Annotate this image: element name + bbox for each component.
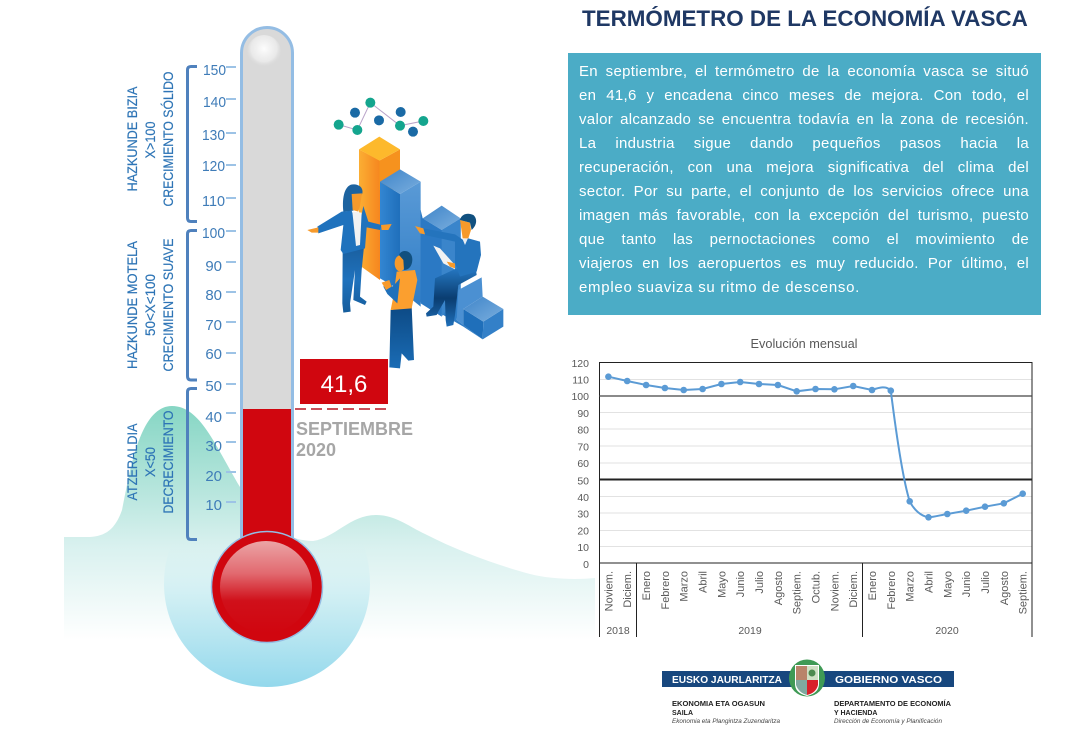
line chart: evolución mensual — [571, 336, 1032, 637]
network nodes — [334, 98, 428, 137]
thermometer scale: 130 — [202, 127, 225, 144]
department text, Basque: EKONOMIA ETA OGASUN — [672, 701, 765, 708]
logo: Gobierno Vasco: GOBIERNO VASCO — [835, 674, 942, 686]
thermometer scale: 60 — [205, 346, 222, 363]
sitting man figure — [415, 214, 481, 327]
thermometer scale: 30 — [205, 438, 222, 455]
month labels — [603, 571, 1030, 614]
blue bars — [380, 169, 503, 339]
date label: SEPTIEMBRE — [296, 419, 413, 439]
month labels: Junio — [961, 571, 973, 597]
month labels: Mayo — [942, 571, 954, 598]
logo: Gobierno Vasco: SAILA — [672, 710, 693, 717]
y axis labels: 90 — [577, 408, 589, 420]
logo band text: EUSKO JAURLARITZA — [672, 674, 782, 686]
logo band — [662, 671, 954, 687]
y axis labels: 10 — [577, 542, 589, 554]
y axis labels: 70 — [577, 442, 589, 454]
vertical label: crecimiento suave: HAZKUNDE MOTELA — [124, 240, 140, 369]
month labels: Abril — [924, 571, 936, 593]
month labels: Octub. — [810, 571, 822, 603]
brackets — [188, 66, 197, 540]
y axis labels: 120 — [571, 358, 589, 370]
panel: summary text: En septiembre, el termómetro de la economía vasca se situó — [579, 63, 1029, 80]
thermometer scale: 10 — [205, 497, 222, 514]
value callout — [295, 359, 413, 460]
month labels: Septiem. — [792, 571, 804, 614]
y axis labels: 80 — [577, 424, 589, 436]
thermometer scale: 100 — [202, 225, 225, 242]
panel: summary text: imagen más favorable, con la excepción del turismo, puesto — [579, 207, 1029, 224]
thermometer tube — [242, 28, 292, 560]
y axis labels: 110 — [572, 374, 589, 386]
year labels — [606, 625, 959, 637]
month labels: Enero — [641, 571, 653, 600]
thermometer bulb — [212, 532, 322, 642]
vertical label: crecimiento sólido: CRECIMIENTO SÓLIDO — [160, 71, 176, 206]
value callout: 2020 — [296, 440, 336, 460]
standing man figure — [382, 251, 417, 368]
month labels: Diciem. — [622, 571, 634, 608]
chart title: Evolución mensual — [750, 336, 858, 351]
month labels: Febrero — [660, 571, 672, 610]
vertical label: crecimiento sólido: HAZKUNDE BIZIA — [124, 86, 140, 192]
month labels: Junio — [735, 571, 747, 597]
month labels: Enero — [867, 571, 879, 600]
orange bar — [359, 137, 400, 280]
month labels: Noviem. — [603, 571, 615, 611]
month labels: Septiem. — [1018, 571, 1030, 614]
year labels: 2019 — [738, 625, 762, 637]
panel: summary text: La industria sigue dando pequeños pasos hacia la — [579, 135, 1029, 152]
logo: Gobierno Vasco — [662, 660, 954, 725]
thermometer scale — [202, 62, 236, 514]
month labels: Agosto — [999, 571, 1011, 605]
background wave — [64, 406, 595, 640]
vertical label: decrecimiento — [124, 410, 176, 514]
vertical label: crecimiento suave: CRECIMIENTO SUAVE — [160, 238, 176, 372]
thermometer scale: 70 — [205, 317, 222, 334]
logo: Gobierno Vasco: Ekonomia eta Plangintza Zuzendaritza — [672, 718, 780, 725]
thermometer scale: 140 — [203, 94, 226, 111]
vertical label: decrecimiento: ATZERALDIA — [124, 423, 140, 500]
month labels: Julio — [754, 571, 766, 594]
illustration: people and bar chart — [307, 98, 503, 368]
value box — [300, 359, 388, 404]
month labels: Julio — [980, 571, 992, 594]
red mercury column — [243, 409, 291, 559]
panel: summary text: que tanto las pernoctaciones como el movimiento de — [579, 231, 1029, 248]
panel: summary text: empleo suaviza su ritmo de descenso. — [579, 279, 860, 296]
month labels: Abril — [698, 571, 710, 593]
background bowl — [164, 536, 370, 687]
thermometer scale: 80 — [205, 287, 222, 304]
y axis labels: 50 — [577, 476, 589, 488]
vertical label: crecimiento suave — [124, 238, 176, 372]
thermometer scale: 90 — [205, 258, 222, 275]
thermometer — [212, 28, 322, 642]
thermometer scale: 20 — [205, 468, 222, 485]
y axis labels: 0 — [583, 559, 589, 571]
dashed level line — [295, 408, 388, 410]
panel: summary text: valor alcanzado se encuentra todavía en la zona de recesión. — [579, 111, 1029, 128]
month labels: Marzo — [679, 571, 691, 602]
thermometer scale: 110 — [202, 193, 225, 210]
y axis labels: 30 — [577, 508, 589, 520]
tube highlight — [247, 35, 281, 69]
panel: summary text: en 41,6 y encadena cinco meses de mejora. Con todo, el — [579, 87, 1029, 104]
y axis labels: 60 — [577, 458, 589, 470]
panel: summary text: recuperación, con una mejora significativa del clima del — [579, 159, 1029, 176]
vertical label: crecimiento sólido — [124, 71, 176, 206]
year labels: 2018 — [606, 625, 630, 637]
month labels: Febrero — [886, 571, 898, 610]
vertical label: crecimiento sólido: X>100 — [142, 121, 158, 158]
thermometer scale: 40 — [205, 409, 222, 426]
vertical label: decrecimiento: X<50 — [142, 447, 158, 477]
panel: summary text: viajeros en los aeropuertos es muy reducido. Por último, el — [579, 255, 1029, 272]
month labels: Noviem. — [829, 571, 841, 611]
logo: Gobierno Vasco: Dirección de Economía y Planificación — [834, 718, 942, 725]
coat of arms — [789, 660, 825, 696]
woman figure — [307, 184, 392, 313]
bulb highlight — [220, 541, 312, 633]
month labels: Marzo — [905, 571, 917, 602]
title: TERMÓMETRO DE LA ECONOMÍA VASCA — [582, 6, 1028, 31]
thermometer scale: 150 — [203, 62, 226, 79]
data markers — [605, 373, 1026, 521]
y axis labels: 100 — [571, 391, 589, 403]
department text, Spanish: DEPARTAMENTO DE ECONOMÍA — [834, 699, 951, 708]
thermometer scale: 120 — [202, 158, 225, 175]
month labels: Mayo — [716, 571, 728, 598]
y axis labels: 20 — [577, 526, 589, 538]
y axis labels: 40 — [577, 492, 589, 504]
month labels: Agosto — [773, 571, 785, 605]
vertical label: crecimiento suave: 50<X<100 — [142, 274, 158, 336]
logo: Gobierno Vasco: Y HACIENDA — [834, 710, 877, 717]
month labels: Diciem. — [848, 571, 860, 608]
panel: summary text — [568, 53, 1041, 315]
y axis labels — [571, 358, 589, 571]
year labels: 2020 — [935, 625, 959, 637]
panel: summary text: sector. Por su parte, el conjunto de los servicios ofrece una — [579, 183, 1029, 200]
vertical label: decrecimiento: DECRECIMIENTO — [160, 410, 176, 514]
value: 41,6 — [321, 371, 367, 398]
thermometer scale: 50 — [205, 378, 222, 395]
data line — [608, 377, 1023, 517]
